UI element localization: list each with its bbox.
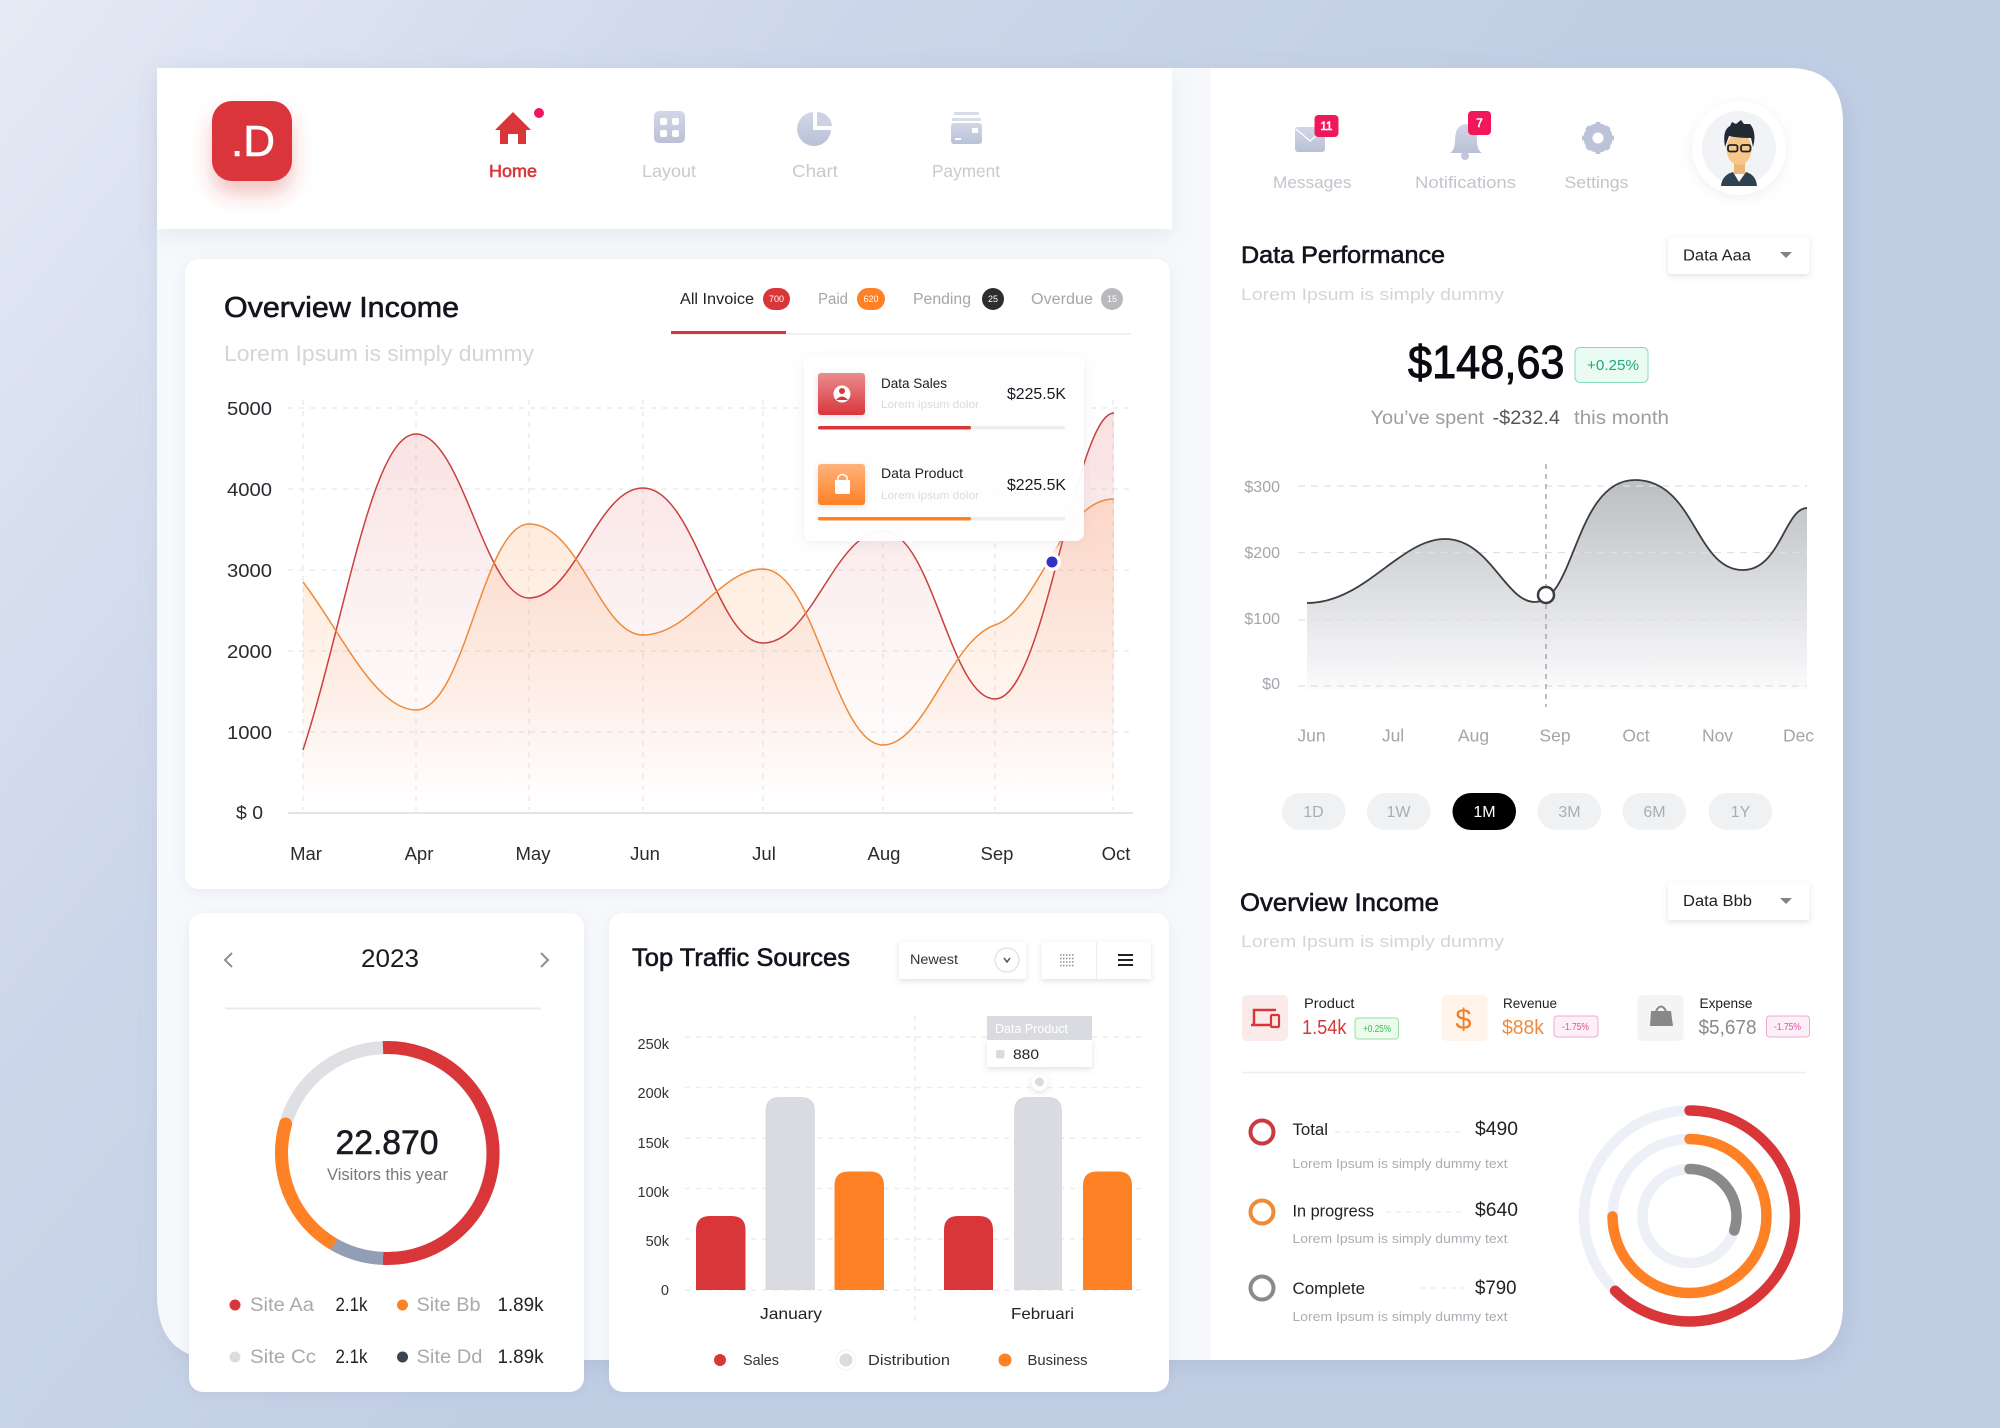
dropdown	[1668, 237, 1810, 274]
stat: product	[1242, 995, 1398, 1041]
legend: 2.1k	[336, 1346, 368, 1368]
time range pills	[1282, 793, 1772, 830]
chart marker	[1043, 553, 1061, 571]
x axis labels: Sep	[1539, 726, 1571, 746]
status row: complete: Complete	[1292, 1279, 1365, 1298]
line chart	[288, 400, 1133, 813]
heading: Overview Income	[1240, 889, 1439, 917]
legend: 1.89k	[498, 1294, 544, 1316]
y axis labels: 100k	[638, 1185, 670, 1201]
y axis labels: 2000	[227, 641, 272, 662]
stat: product: 1.54k	[1302, 1017, 1347, 1039]
messages	[1273, 115, 1352, 192]
x axis labels: Aug	[868, 843, 900, 864]
spend summary: -$232.4	[1492, 408, 1560, 429]
tabs: 25	[988, 294, 998, 304]
x axis labels: Oct	[1102, 843, 1130, 864]
legend: 1.89k	[498, 1346, 544, 1368]
nav item: Payment	[932, 112, 1000, 181]
status row: total: Lorem Ipsum is simply dummy text	[1292, 1157, 1508, 1171]
bar tooltip: Data Product	[995, 1021, 1068, 1036]
status row: total: Total	[1292, 1120, 1328, 1139]
legend	[230, 1294, 544, 1368]
x axis labels: Mar	[290, 843, 322, 864]
logo	[212, 101, 292, 181]
stat: expense: Expense	[1700, 995, 1753, 1011]
nav item: Layout	[642, 111, 696, 181]
dropdown: Data Bbb	[1683, 893, 1752, 910]
bar tooltip	[987, 1016, 1092, 1091]
year selector	[225, 945, 548, 973]
messages: Messages	[1273, 173, 1352, 192]
y axis labels: 250k	[638, 1037, 670, 1053]
heading: Data Performance	[1241, 242, 1445, 269]
legend: 2.1k	[336, 1294, 368, 1316]
dropdown: Data Aaa	[1683, 248, 1751, 264]
time range pills: 6M	[1643, 804, 1666, 821]
x axis labels: Jul	[752, 843, 776, 864]
sort dropdown	[899, 942, 1026, 979]
panel: data performance	[1241, 237, 1814, 830]
dropdown	[1668, 883, 1810, 920]
donut chart	[279, 1048, 493, 1259]
donut caption: Visitors this year	[327, 1166, 448, 1184]
y axis labels: $300	[1244, 479, 1280, 496]
heading: Overview Income	[224, 292, 459, 324]
panel: top navigation	[157, 68, 1172, 229]
x axis labels: Jun	[630, 843, 660, 864]
subheading: Lorem Ipsum is simply dummy	[1241, 285, 1505, 304]
x axis labels	[290, 843, 1130, 864]
y axis labels: 200k	[638, 1086, 670, 1102]
view toggle	[1042, 942, 1151, 979]
spend summary: this month	[1574, 408, 1669, 429]
nav item: Home	[489, 108, 544, 181]
time range pills: 1W	[1386, 804, 1411, 821]
settings: Settings	[1564, 173, 1628, 192]
notifications: Notifications	[1415, 173, 1516, 192]
panel: right sidebar background	[1211, 68, 1843, 1360]
status row: in progress: Lorem Ipsum is simply dummy text	[1292, 1232, 1508, 1246]
y axis labels: $ 0	[236, 802, 263, 823]
bar legend: Sales	[743, 1353, 779, 1369]
nav item: Home: Home	[489, 161, 537, 181]
x axis labels: Jul	[1382, 726, 1404, 746]
tooltip row: data sales: Data Sales	[881, 375, 947, 391]
settings	[1564, 122, 1628, 192]
stat: revenue: Revenue	[1503, 995, 1557, 1011]
notifications: 7	[1476, 116, 1483, 130]
y axis labels: $200	[1244, 545, 1280, 562]
radial chart	[1584, 1110, 1795, 1322]
stat: revenue: -1.75%	[1562, 1022, 1589, 1033]
tabs: 15	[1107, 294, 1117, 304]
time range pills: 1M	[1473, 804, 1496, 821]
tooltip	[804, 355, 1084, 562]
y axis labels: 0	[661, 1283, 669, 1299]
nav item: Layout: Layout	[642, 161, 696, 181]
x axis labels: May	[516, 843, 551, 864]
year selector: 2023	[361, 945, 419, 973]
time range pills: 1Y	[1731, 804, 1751, 821]
tabs: 700	[769, 294, 784, 304]
y axis labels: 1000	[227, 722, 272, 743]
y axis labels: 3000	[227, 560, 272, 581]
nav item: Payment: Payment	[932, 161, 1000, 181]
logo: .D	[231, 117, 275, 166]
stat: expense	[1638, 995, 1810, 1041]
panel: right header	[1273, 101, 1786, 195]
status row: total	[1250, 1119, 1518, 1171]
y axis labels	[227, 398, 272, 823]
area chart	[1298, 464, 1807, 707]
stat: product: Product	[1304, 995, 1355, 1011]
spend summary: You’ve spent	[1370, 408, 1485, 429]
dashboard panel base	[157, 68, 1843, 1360]
tabs	[671, 288, 1131, 335]
status row: complete: Lorem Ipsum is simply dummy text	[1292, 1310, 1508, 1324]
bar tooltip: 880	[1013, 1046, 1039, 1062]
stat: product: +0.25%	[1363, 1024, 1391, 1035]
status row: total: $490	[1475, 1119, 1518, 1140]
spend summary	[1370, 408, 1669, 429]
notifications	[1415, 111, 1516, 192]
subheading: Lorem Ipsum is simply dummy	[224, 341, 534, 366]
bar legend	[709, 1349, 1088, 1371]
y axis labels: 50k	[646, 1234, 670, 1250]
heading: Top Traffic Sources	[632, 944, 850, 972]
legend: Site Cc	[250, 1346, 316, 1368]
tooltip row: data sales: Lorem ipsum dolor	[881, 399, 979, 411]
x axis labels	[1297, 726, 1814, 746]
tooltip row: data product: $225.5K	[1007, 477, 1066, 494]
panel: overview income chart	[185, 259, 1170, 889]
x axis labels: Oct	[1622, 726, 1650, 746]
tooltip row: data product: Lorem ipsum dolor	[881, 490, 979, 502]
messages: 11	[1321, 121, 1332, 133]
avatar	[1692, 101, 1786, 195]
x axis labels: Jun	[1297, 726, 1326, 746]
nav item: Chart: Chart	[792, 161, 838, 181]
y axis labels: 4000	[227, 479, 272, 500]
donut value: 22.870	[336, 1124, 438, 1162]
bar legend: Distribution	[868, 1353, 950, 1369]
tooltip row: data sales	[818, 373, 1066, 430]
stat: expense: -1.75%	[1774, 1022, 1801, 1033]
y axis labels: 150k	[638, 1136, 670, 1152]
panel: overview income summary	[1240, 883, 1810, 1324]
stat: revenue: $88k	[1502, 1017, 1545, 1039]
panel: top traffic sources	[609, 913, 1169, 1392]
tooltip row: data sales: $225.5K	[1007, 386, 1066, 403]
tabs: Paid	[818, 291, 848, 308]
tabs: 620	[863, 294, 879, 304]
tabs: Overdue	[1031, 291, 1093, 308]
x axis labels: Apr	[405, 843, 433, 864]
panel: visitors donut	[189, 913, 584, 1392]
legend: Site Bb	[416, 1294, 481, 1316]
y axis labels	[638, 1037, 670, 1299]
y axis labels: $100	[1244, 611, 1280, 628]
x axis labels: Sep	[981, 843, 1013, 864]
y axis labels	[1244, 479, 1280, 693]
headline value: $148,63	[1408, 336, 1564, 388]
subheading: Lorem Ipsum is simply dummy	[1241, 932, 1505, 951]
status row: in progress	[1250, 1200, 1518, 1246]
legend: Site Dd	[416, 1346, 482, 1368]
y axis labels: $0	[1262, 676, 1280, 693]
time range pills: 3M	[1558, 804, 1581, 821]
legend: Site Aa	[250, 1294, 314, 1316]
change badge	[1575, 348, 1648, 382]
tabs: All Invoice	[680, 291, 754, 308]
nav item: Chart	[792, 112, 838, 181]
change badge: +0.25%	[1587, 357, 1639, 374]
month labels: Februari	[1011, 1306, 1074, 1323]
stat: expense: $5,678	[1698, 1017, 1756, 1039]
tooltip row: data product: Data Product	[881, 465, 963, 481]
sort dropdown: Newest	[910, 952, 958, 967]
x axis labels: Nov	[1702, 726, 1733, 746]
time range pills: 1D	[1303, 804, 1324, 821]
month labels: January	[760, 1306, 822, 1323]
bar legend: Business	[1028, 1353, 1088, 1369]
stat: revenue: $	[1455, 1004, 1472, 1036]
tooltip row: data product	[818, 464, 1066, 520]
x axis labels: Dec	[1783, 726, 1814, 746]
status row: in progress: In progress	[1292, 1202, 1374, 1220]
stat: revenue	[1442, 995, 1598, 1041]
status row: in progress: $640	[1475, 1200, 1518, 1221]
x axis labels: Aug	[1458, 726, 1489, 746]
month labels	[760, 1306, 1074, 1323]
status row: complete	[1250, 1276, 1516, 1324]
status row: complete: $790	[1475, 1278, 1516, 1299]
y axis labels: 5000	[227, 398, 272, 419]
tabs: Pending	[913, 291, 971, 308]
bar chart	[685, 1016, 1143, 1321]
